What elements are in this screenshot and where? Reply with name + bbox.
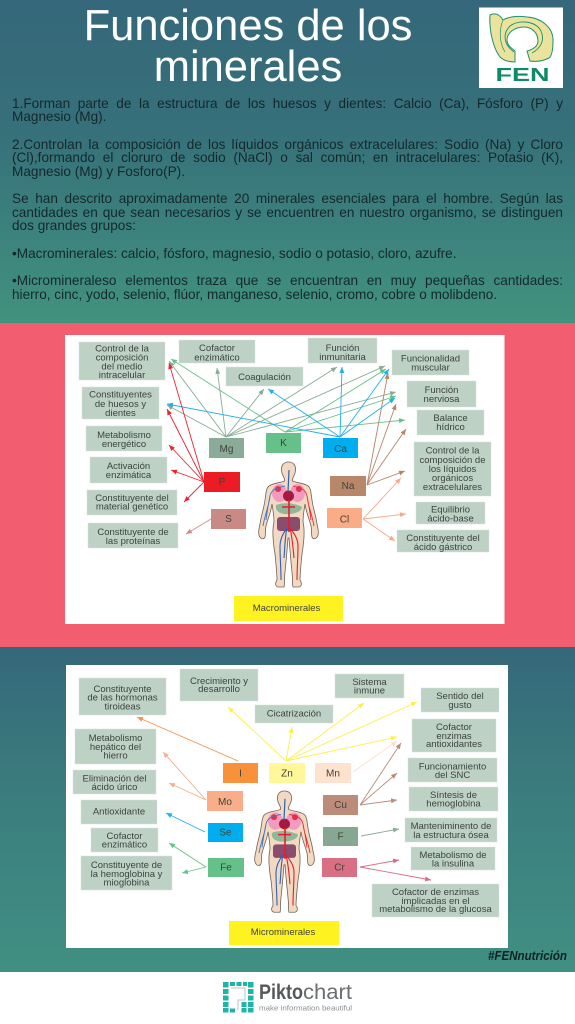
box: hormonas tiroideas: de las hormonas [87,693,158,704]
mineral: Cr: Cr [334,862,345,874]
microminerals definition [12,273,563,302]
box: control del medio intracelular: composición [96,352,148,363]
box: antioxidante: Antioxidante [93,806,145,818]
logo: FEN: FEN [496,64,550,85]
mineral: Zn: Zn [281,768,293,780]
macrominerals definition: •Macrominerales: calcio, fósforo, magnesio, sodio o potasio, cloro, azufre. [12,246,456,261]
arrows: magnesium [167,361,396,437]
box: cofactor enzimas antioxidantes [412,719,496,752]
arrows: phosphorus [167,363,204,502]
box: sentido del gusto: gusto [448,700,472,711]
box: función nerviosa: Función [425,385,458,396]
arrows: calcium [167,367,395,437]
mineral: Cl [327,508,362,528]
box: sentido del gusto: Sentido del [436,691,484,702]
box: cofactor de enzimas glucosa [372,884,499,917]
box: control de líquidos extracelulares: los líquidos [429,464,477,475]
box: constituyente de las proteínas [88,523,178,548]
box: metabolismo hepático del hierro: hepático del [90,742,141,753]
human body figure [255,791,314,912]
box: sentido del gusto [421,688,499,712]
box: material genético: Constituyente del [95,493,169,504]
box: constituyente de las proteínas: las proteínas [106,536,160,547]
box: cofactor enzimas antioxidantes: Cofactor [436,722,472,733]
hashtag: #FENnutrición [488,948,567,963]
panel: microminerals [66,665,508,948]
box: eliminación del ácido úrico: Eliminación del [83,774,146,784]
microminerals definition: •Micromineraleso elementos traza que se encuentran en muy pequeñas cantidades: [12,273,563,288]
mineral: Ca: Ca [334,444,347,455]
box: coagulación [226,367,303,386]
box: cofactor enzimático [179,340,255,363]
mineral: S [211,509,246,529]
box: sistema inmune: inmune [354,686,385,696]
box: material genético [87,490,177,515]
mineral: Ca [323,438,358,458]
box: cicatrización [255,705,333,723]
intro paragraph 1 [12,96,563,124]
label: Microminerales: Microminerales [251,927,315,938]
box: constituyentes de huesos: dientes [105,408,136,419]
arrows: iron [169,843,206,873]
box: control del medio intracelular: del medio [101,361,143,372]
box: hemoglobina y mioglobina [81,856,172,890]
box: constituyente de las proteínas: Constituyente de [97,527,169,538]
label: Macrominerales [234,596,343,621]
box: constituyentes de huesos: Constituyentes [89,390,152,401]
box: control del medio intracelular: intracelular [99,370,145,381]
box: cicatrización: Cicatrización [267,708,321,720]
mineral: Fe [208,858,244,877]
mineral: Mn [315,763,351,783]
intro paragraph 3: dos grandes grupos: [12,218,136,233]
mineral: Cl: Cl [340,514,349,526]
box: cofactor enzimático: enzimático [194,352,240,363]
mineral: K: K [280,438,287,449]
box: funcionalidad muscular: muscular [411,362,450,374]
mineral: Na [330,476,366,496]
box: constituyentes de huesos: de huesos y [95,399,146,410]
box: equilibrio ácido-base: ácido-base [427,514,474,524]
box: eliminación del ácido úrico: ácido úrico [92,782,137,793]
box: crecimiento y desarrollo: Crecimiento y [190,676,248,687]
mineral: Mg [209,438,244,458]
wordmark: Pikto [259,981,303,1004]
label: Macrominerales: Macrominerales [253,603,321,614]
box: equilibrio ácido-base [416,502,485,524]
arrows: chlorine [363,478,406,541]
box: balance hídrico: Balance [433,413,468,424]
title [84,2,412,90]
box: constituyentes de huesos [82,387,159,419]
box: coagulación: Coagulación [238,372,291,383]
box: metabolismo energético: Metabolismo [97,430,151,441]
footer: Piktochart logo [223,981,352,1012]
mineral: Cu [323,795,358,815]
box: activación enzimática [90,457,167,483]
logo: FEN [479,8,563,88]
arrows: potassium [171,359,405,432]
box: control de líquidos extracelulares: extracelulares [423,482,482,493]
box: hormonas tiroideas [79,678,166,715]
box: eliminación del ácido úrico [73,770,156,794]
box: funcionalidad muscular: Funcionalidad [401,354,460,364]
box: función nerviosa [407,381,476,407]
box: funcionamiento del SNC: Funcionamiento [419,762,486,772]
box: balance hídrico [417,410,484,435]
box: mantenimiento de la estructura ósea: Manteniminento de [411,821,491,832]
box: ácido gástrico [397,530,489,553]
box: función inmunitaria: Función [326,343,359,354]
box: equilibrio ácido-base: Equilibrio [431,504,470,516]
box: metabolismo de la insulina: Metabolismo de [419,850,487,861]
box: material genético: material genético [96,502,168,513]
arrows: chromium [360,860,431,880]
box: cofactor enzimático: Cofactor [107,831,142,842]
arrow: manganese [353,741,397,772]
arrows: copper [360,743,401,805]
mineral: Cr [322,858,357,877]
box: síntesis de hemoglobina [409,787,498,811]
mineral: Mo [207,791,243,811]
box: cofactor de enzimas glucosa: implicadas en el [401,896,470,907]
box: control del medio intracelular: Control de la [95,344,150,354]
arrow: fluorine [361,829,399,836]
mineral: F [323,827,358,846]
intro paragraph 2 [12,136,563,179]
box: cofactor de enzimas glucosa: Cofactor de enzimas [392,887,479,898]
human body figure [259,462,318,587]
mineral: Mn: Mn [326,768,340,780]
intro paragraph 3: cantidades en que sean necesarios y se encuentren en nuestro organismo, se distinguen [12,205,563,220]
box: metabolismo de la insulina: la insulina [432,858,475,870]
box: sistema inmune: Sistema [352,677,387,688]
box: antioxidante [81,800,157,824]
mineral: Cu: Cu [334,800,347,811]
box: crecimiento y desarrollo: desarrollo [198,684,240,695]
box: control de líquidos extracelulares: composición de [419,455,486,466]
box: síntesis de hemoglobina: Síntesis de [430,790,477,801]
box: función inmunitaria: inmunitaria [319,352,366,363]
box: síntesis de hemoglobina: hemoglobina [426,798,481,810]
box: hemoglobina y mioglobina: la hemoglobina y [91,869,163,880]
box: activación enzimática: Activación [107,461,150,472]
box: balance hídrico: hídrico [436,422,465,433]
mineral: P [204,472,240,492]
footer: Piktochart logo: chart [303,981,352,1004]
title: minerales [154,42,342,90]
box: cofactor enzimático: Cofactor [199,343,235,354]
box: hormonas tiroideas: Constituyente [93,684,152,695]
box: cofactor enzimático [91,828,158,852]
box: cofactor enzimático: enzimático [102,840,147,850]
mineral: Se [208,823,243,842]
intro paragraph 3: Se han descrito aproximadamente 20 minerales esenciales para el hombre. Según las [12,191,563,206]
intro paragraph 3 [12,191,563,233]
box: hemoglobina y mioglobina: Constituyente de [91,860,162,871]
arrow: selenium [166,813,205,832]
label: Microminerales [229,921,339,945]
tagline: make information beautiful [259,1004,352,1012]
box: ácido gástrico: ácido gástrico [414,542,472,553]
icon: Piktochart mark [223,982,254,1012]
mineral: F: F [337,832,344,842]
box: metabolismo hepático del hierro [75,729,156,764]
mineral: Mo: Mo [218,797,232,808]
box: mantenimiento de la estructura ósea [405,818,497,842]
box: mantenimiento de la estructura ósea: la estructura ósea [413,830,489,841]
box: funcionalidad muscular [392,350,469,375]
box: función inmunitaria [308,338,377,363]
box: control del medio intracelular [79,342,165,381]
mineral: I: I [239,768,242,780]
box: funcionamiento del SNC: del SNC [435,770,470,781]
box: ácido gástrico: Constituyente del [406,533,480,544]
panel: macrominerals [65,335,504,624]
arrow: sulfur [186,519,211,534]
box: activación enzimática: enzimática [106,470,152,481]
mineral: I [223,763,258,783]
mineral: K [266,433,301,453]
arrows: molybdenum [163,752,206,800]
box: metabolismo hepático del hierro: hierro [103,750,128,761]
mineral: Mg: Mg [220,444,233,455]
box: control de líquidos extracelulares [414,442,491,496]
arrows: sodium [367,373,406,485]
box: control de líquidos extracelulares: Control de la [426,446,480,457]
intro paragraph 1: 1.Forman parte de la estructura de los huesos y dientes: Calcio (Ca), Fósforo (P) y [12,96,563,110]
box: metabolismo de la insulina [411,847,495,870]
title: Funciones de los [84,2,412,50]
box: metabolismo energético [86,426,162,451]
box: control de líquidos extracelulares: orgánicos [432,473,473,484]
arrows: zinc [228,702,417,761]
box: cofactor enzimas antioxidantes: enzimas [436,731,472,742]
mineral: Se: Se [219,828,232,838]
intro paragraph 2: (Cl),formando el cloruro de sodio (NaCl) o sal común; en intracelulares: Potasio (K), [12,150,563,165]
box: hormonas tiroideas: tiroideas [105,701,141,712]
mineral: Na: Na [342,481,355,492]
mineral: Fe: Fe [220,862,232,874]
box: metabolismo energético: energético [102,439,146,450]
intro paragraph 2: 2.Controlan la composición de los líquidos orgánicos extracelulares: Sodio (Na) y Cloro [12,136,563,152]
box: cofactor de enzimas glucosa: metabolismo de la glucosa [379,904,492,915]
intro paragraph 2: Magnesio (Mg) y Fosforo(P). [12,164,185,179]
box: cofactor enzimas antioxidantes: antioxidantes [426,739,482,750]
box: metabolismo hepático del hierro: Metabolismo [89,733,142,744]
arrow: iodine [137,717,238,761]
intro paragraph 1: Magnesio (Mg). [12,109,106,124]
box: crecimiento y desarrollo [180,669,258,701]
box: funcionamiento del SNC [408,758,497,782]
box: hemoglobina y mioglobina: mioglobina [104,878,150,888]
mineral: Zn [269,763,305,783]
box: sistema inmune [335,674,404,698]
microminerals definition: hierro, cinc, yodo, selenio, flúor, manganeso, selenio, cromo, cobre o molibdeno. [12,287,497,302]
box: función nerviosa: nerviosa [424,394,460,405]
mineral: S: S [225,514,232,525]
mineral: P: P [219,477,226,488]
